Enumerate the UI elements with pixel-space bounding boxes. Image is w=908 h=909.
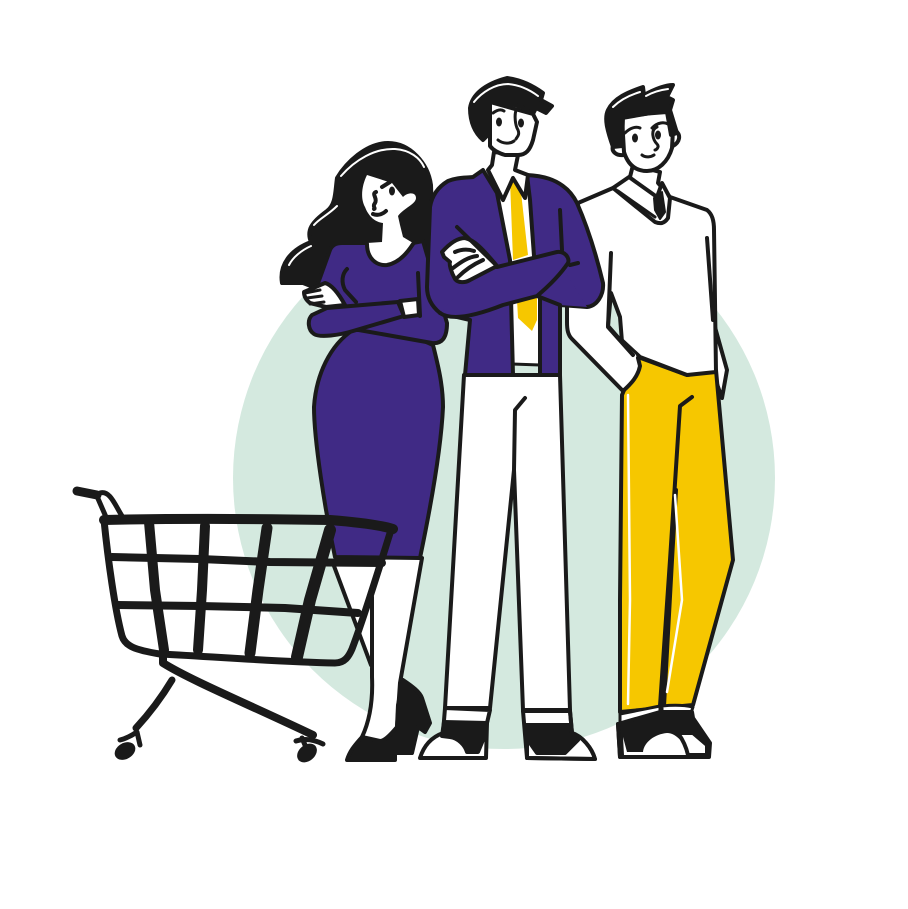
woman crossed arm and hand: [304, 283, 345, 307]
woman torso: [312, 241, 447, 343]
cart basket: [104, 520, 391, 663]
right man sweater: [575, 165, 716, 375]
right man face: [625, 123, 668, 157]
middle man hand: [442, 238, 497, 282]
right man eyes: [632, 130, 661, 142]
right man shoes: [618, 712, 710, 757]
shopping cart: [77, 491, 393, 766]
right man pants: [620, 357, 733, 712]
woman legs: [334, 556, 422, 737]
cart vertical bars: [149, 522, 164, 650]
middle man head: [490, 102, 537, 155]
figure: woman: [282, 143, 447, 760]
cart handle: [77, 491, 97, 495]
middle man left cuff and shoe: [420, 708, 490, 758]
figure: man in the middle: [420, 78, 603, 759]
woman face lines: [367, 182, 413, 265]
woman eye: [389, 186, 395, 196]
middle man eyes: [496, 118, 524, 128]
right man hair highlights: [613, 89, 668, 107]
woman shoes: [347, 680, 430, 760]
right man pants creases: [660, 397, 692, 706]
woman skirt: [314, 330, 443, 558]
right man head: [622, 110, 673, 171]
middle man face: [493, 108, 519, 143]
woman cuff: [400, 299, 419, 317]
right man near arm and hand: [567, 230, 640, 391]
middle man shirt: [492, 170, 540, 364]
right man hair: [606, 85, 677, 147]
cart rim: [104, 519, 393, 529]
woman hair: [282, 143, 433, 292]
cart frame: [163, 652, 313, 735]
right man collar and tie: [613, 177, 670, 223]
middle man collar: [488, 152, 528, 200]
right man ears: [613, 131, 679, 155]
figure: man on the right: [567, 85, 733, 757]
middle man jacket: [427, 170, 513, 375]
right man cuffs: [620, 706, 660, 725]
woman face and neck: [362, 175, 416, 265]
cart horizontal bars: [112, 557, 382, 613]
cart wheels: [111, 739, 321, 766]
woman hair highlights: [289, 149, 424, 265]
middle man trousers: [445, 375, 570, 710]
background circle: [233, 207, 775, 749]
middle man tie: [510, 180, 537, 331]
right man far arm: [712, 320, 727, 398]
middle man hair: [470, 78, 552, 140]
middle man right cuff and shoe: [523, 711, 595, 759]
middle man crossed arm: [440, 252, 587, 317]
middle man hair highlights: [474, 84, 538, 102]
